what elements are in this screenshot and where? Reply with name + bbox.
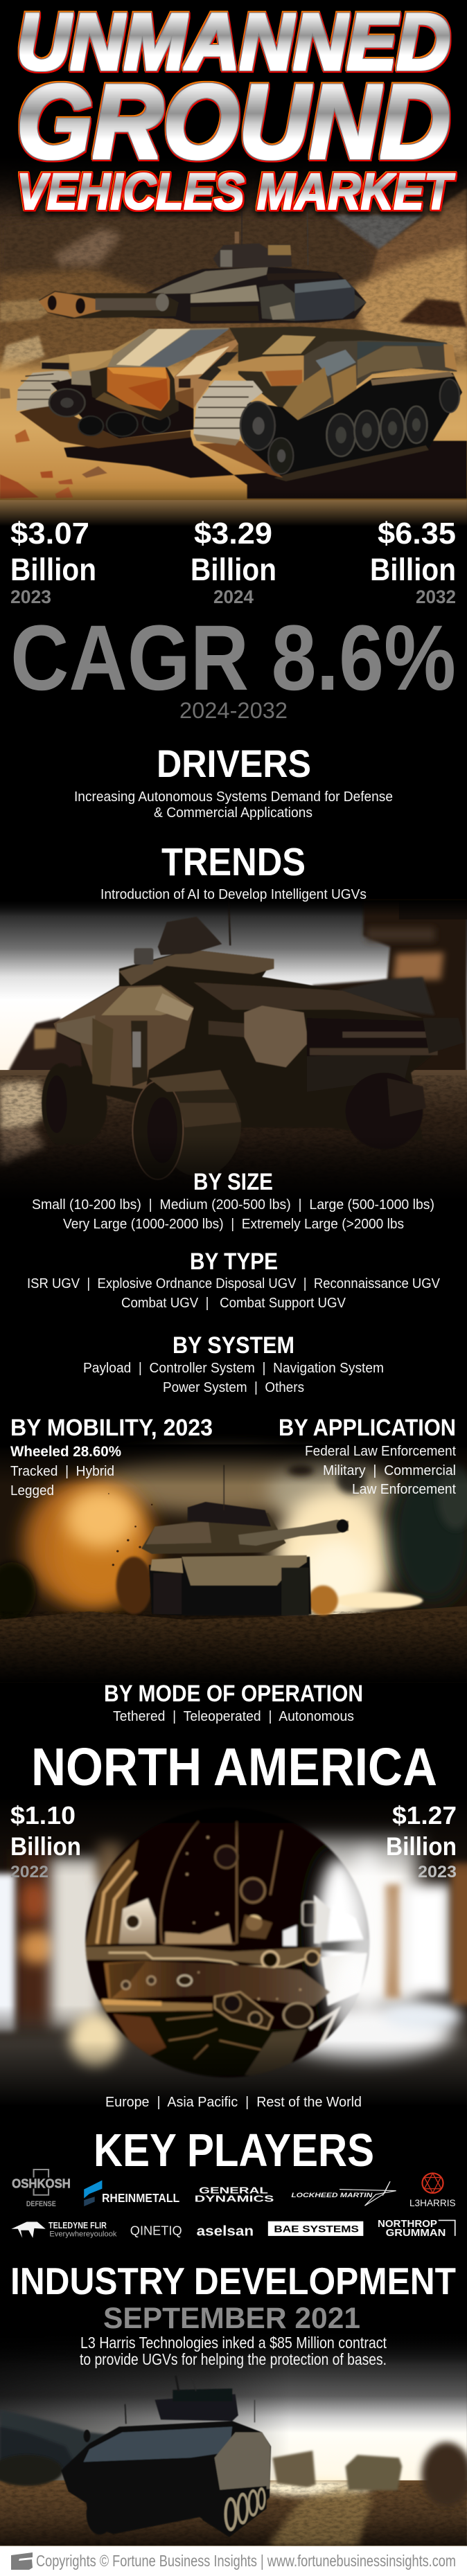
- drivers text: & Commercial Applications: [154, 805, 312, 821]
- segment: by mobility: Tracked | Hybrid: [10, 1464, 114, 1479]
- stat: north america 2023: $1.27: [392, 1801, 457, 1830]
- logo: General Dynamics: DYNAMICS: [195, 2194, 274, 2203]
- logo: Lockheed Martin: LOCKHEED MARTIN: [291, 2192, 373, 2199]
- segment: by type: ISR UGV | Explosive Ordnance Disposal UGV | Reconnaissance UGV: [27, 1276, 441, 1291]
- segment: by application: Military | Commercial: [323, 1463, 456, 1478]
- rear hull: [40, 329, 167, 372]
- central hull: [89, 367, 179, 420]
- heading: trends: TRENDS: [161, 840, 306, 884]
- equator band: [85, 1946, 321, 1967]
- stat: north america 2022: 2022: [10, 1863, 49, 1881]
- segment: by type: [27, 1249, 441, 1311]
- heading: drivers: DRIVERS: [157, 742, 311, 785]
- logo: Rheinmetall: RHEINMETALL: [102, 2190, 179, 2205]
- logo: Teledyne FLIR: [11, 2220, 117, 2239]
- stat: 2032 market size: Billion: [370, 552, 456, 587]
- stat: 2023 market size: [10, 517, 96, 607]
- stat: 2024 market size: Billion: [191, 552, 276, 587]
- background trucks: [272, 2451, 316, 2487]
- segment: by system: Power System | Others: [163, 1380, 304, 1395]
- logo: Oshkosh Defense: DEFENSE: [26, 2200, 56, 2208]
- lower hemisphere: [104, 1961, 331, 2006]
- logo: L3Harris: L3HARRIS: [409, 2198, 456, 2209]
- logo: Oshkosh Defense: [12, 2170, 71, 2208]
- main right hull: [283, 341, 457, 420]
- segment: by application: Law Enforcement: [352, 1482, 456, 1497]
- drivers text: [74, 789, 393, 821]
- drivers text: Increasing Autonomous Systems Demand for Defense: [74, 789, 393, 805]
- turret sensors: [213, 211, 308, 268]
- logo: QinetiQ: QINETIQ: [130, 2224, 182, 2239]
- stat: 2023 market size: Billion: [10, 552, 96, 587]
- segment: by mode of operation: BY MODE OF OPERATION: [104, 1681, 363, 1707]
- segment: by mobility: Legged: [10, 1483, 54, 1499]
- stat: north america 2022: [10, 1801, 81, 1881]
- stat: north america 2023: [386, 1801, 457, 1881]
- front tire: [158, 1073, 241, 1177]
- image: rusty armored vehicle: [0, 900, 467, 1209]
- industry development text: to provide UGVs for helping the protection of bases.: [80, 2350, 387, 2368]
- stat: north america 2023: 2023: [418, 1863, 457, 1881]
- image: tank in dust: [0, 1444, 467, 1683]
- stat: 2024 market size: 2024: [213, 587, 254, 607]
- icon: Fortune Business Insights logo: [11, 2552, 33, 2570]
- turret: [141, 1513, 286, 1554]
- front wheels: [240, 402, 275, 450]
- sphere and floor fade: [0, 2041, 467, 2114]
- logo: Northrop Grumman: NORTHROP: [378, 2218, 437, 2230]
- segment: by system: [83, 1332, 384, 1395]
- CAGR period: 2024-2032: [179, 698, 288, 723]
- logo: General Dynamics: GENERAL: [199, 2185, 268, 2195]
- industry development text: [80, 2334, 387, 2368]
- industry development text: L3 Harris Technologies inked a $85 Million contract: [80, 2334, 387, 2352]
- tank: [0, 267, 467, 499]
- stat: north america 2023: Billion: [386, 1832, 457, 1861]
- heading: key players: KEY PLAYERS: [94, 2125, 374, 2176]
- gun barrel: [39, 291, 179, 319]
- stat: 2023 market size: $3.07: [10, 517, 89, 551]
- segment: by system: BY SYSTEM: [173, 1332, 294, 1359]
- stat: 2032 market size: [370, 517, 456, 607]
- front hub: [244, 1005, 308, 1067]
- logo: Northrop Grumman: GRUMMAN: [386, 2227, 446, 2239]
- centre slot hull: [174, 334, 247, 409]
- stat: 2032 market size: $6.35: [378, 517, 456, 551]
- logo: Teledyne FLIR: Everywhereyoulook: [49, 2230, 117, 2239]
- segment: by mobility: [10, 1415, 213, 1499]
- segment: by size: Small (10-200 lbs) | Medium (200-500 lbs) | Large (500-1000 lbs): [32, 1197, 434, 1213]
- main vehicle: [61, 2376, 271, 2537]
- logo: L3Harris: [409, 2173, 456, 2209]
- road wheels: [200, 2486, 267, 2537]
- segment: by size: BY SIZE: [193, 1169, 273, 1195]
- left metal rim: [85, 1840, 139, 1946]
- logo: Rheinmetall: [84, 2181, 179, 2206]
- under carriage: [244, 373, 462, 480]
- image: armored vehicles convoy: [0, 2331, 467, 2548]
- dust kicked up: [116, 1557, 152, 1614]
- company logos: [11, 2170, 456, 2239]
- segment: by size: Very Large (1000-2000 lbs) | Extremely Large (>2000 lbs: [63, 1217, 404, 1232]
- front track: [200, 441, 283, 478]
- logo: Oshkosh Defense: OSHKOSH: [12, 2177, 71, 2191]
- segment: by mode of operation: Tethered | Teleoperated | Autonomous: [113, 1709, 354, 1724]
- footer bar: [0, 2546, 467, 2576]
- other regions: Europe | Asia Pacific | Rest of the World: [105, 2095, 362, 2110]
- segment: by mobility: Wheeled 28.60%: [10, 1444, 121, 1460]
- hull: [53, 949, 438, 1141]
- ground: [0, 1606, 467, 1683]
- stat: north america 2022: $1.10: [10, 1801, 76, 1830]
- title: [17, 0, 455, 220]
- logo: General Dynamics: [195, 2185, 274, 2203]
- segment: by type: BY TYPE: [190, 1249, 278, 1275]
- logo: Teledyne FLIR: TELEDYNE FLIR: [49, 2220, 107, 2230]
- right highlight: [317, 1858, 362, 1996]
- tracks and hull: [149, 1557, 311, 1616]
- logo: BAE Systems: [268, 2221, 363, 2236]
- stat: north america 2022: Billion: [10, 1832, 81, 1861]
- stat: 2024 market size: $3.29: [194, 517, 272, 551]
- turret gear on roof: [158, 917, 222, 955]
- image: metallic sphere: [0, 1794, 467, 2114]
- segment: by size: [32, 1169, 434, 1232]
- stat: 2024 market size: [191, 517, 276, 607]
- logo: Northrop Grumman: [378, 2218, 455, 2239]
- sphere right edge glow: [345, 1849, 389, 2015]
- logo: Lockheed Martin: [291, 2181, 396, 2206]
- stat: 2023 market size: 2023: [10, 587, 51, 607]
- segment: by mobility: BY MOBILITY, 2023: [10, 1415, 213, 1441]
- centre panel reflection: [165, 1924, 232, 1944]
- image: desert tank hero: [0, 151, 467, 546]
- rocks: [15, 429, 30, 442]
- main gun: [238, 1520, 349, 1546]
- segment: by system: Payload | Controller System | Navigation System: [83, 1361, 384, 1376]
- segment: by application: Federal Law Enforcement: [305, 1444, 456, 1459]
- segment: by mode of operation: [104, 1681, 363, 1724]
- meridian lines: [161, 1821, 282, 1944]
- segment: by type: Combat UGV | Combat Support UGV: [121, 1296, 346, 1311]
- industry development date: SEPTEMBER 2021: [103, 2302, 360, 2335]
- rear track: [19, 404, 191, 448]
- turret: [134, 267, 367, 323]
- segment: by application: [279, 1415, 456, 1497]
- sphere: [83, 1807, 372, 2079]
- trends text: Introduction of AI to Develop Intelligent UGVs: [100, 887, 367, 902]
- logo: BAE Systems: BAE SYSTEMS: [274, 2224, 359, 2235]
- stat: 2032 market size: 2032: [416, 587, 456, 607]
- logo: Aselsan: aselsan: [197, 2224, 254, 2239]
- back tire: [48, 1066, 107, 1145]
